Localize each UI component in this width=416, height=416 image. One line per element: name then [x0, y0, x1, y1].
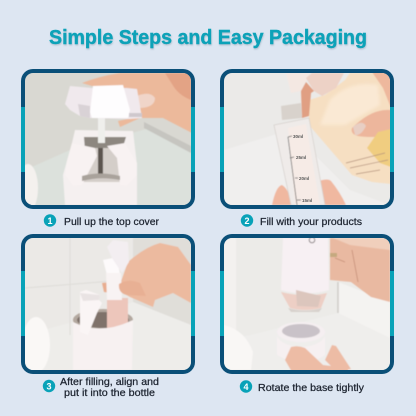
device rim and contents	[73, 309, 133, 331]
thumb and label	[352, 110, 391, 137]
caption text 1: Pull up the top cover	[64, 216, 159, 228]
device body	[63, 130, 137, 205]
caption text 4: Rotate the base tightly	[258, 382, 365, 394]
step badge 3: 3	[46, 382, 52, 392]
fingers	[285, 346, 348, 372]
vial scale labels: 30ml	[293, 134, 303, 139]
step badge 2: 2	[244, 216, 250, 226]
stem	[98, 117, 105, 143]
pouch	[281, 292, 327, 310]
device	[281, 238, 329, 294]
hand	[82, 73, 192, 133]
caption: step 4	[240, 380, 365, 394]
vial scale labels: 15ml	[302, 198, 312, 203]
panel: step 3 photo	[21, 234, 195, 374]
caption text 3	[60, 376, 159, 399]
vial scale labels: 20ml	[299, 176, 309, 181]
vial	[103, 258, 120, 273]
panel: step 4 photo	[220, 234, 394, 374]
top cover	[65, 86, 142, 119]
vial scale labels	[293, 134, 312, 203]
caption: step 2	[241, 214, 362, 228]
lotion bottle	[309, 73, 391, 184]
panel: step 2 photo	[220, 69, 394, 209]
caption: step 1	[44, 214, 159, 228]
hand	[118, 243, 191, 307]
device body	[73, 320, 133, 370]
caption: step 3	[43, 376, 159, 399]
vial	[281, 103, 302, 120]
fingers	[272, 185, 291, 205]
small caps	[79, 290, 102, 328]
step badge 4: 4	[243, 382, 249, 392]
thumb	[119, 281, 146, 296]
panel: step 1 photo	[18, 69, 195, 212]
nozzle	[287, 74, 308, 92]
caption text 3: put it into the bottle	[64, 387, 155, 399]
base cup	[284, 324, 293, 326]
caption text 2: Fill with your products	[260, 216, 362, 228]
vial scale labels: 25ml	[296, 155, 306, 160]
title: Simple Steps and Easy Packaging	[49, 26, 367, 49]
hand	[330, 238, 390, 302]
step badge 1: 1	[47, 216, 53, 226]
caption text 3: After filling, align and	[60, 376, 159, 388]
